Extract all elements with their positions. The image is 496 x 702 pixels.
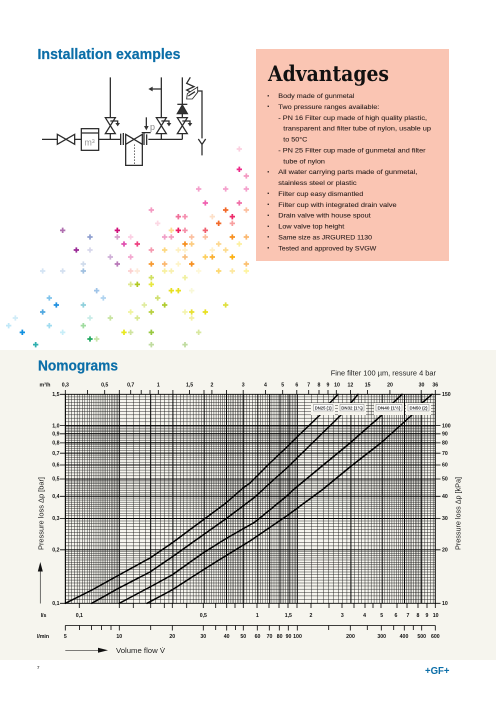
- list: advantages: Same size as JRGURED 1130: [278, 234, 372, 241]
- axis: l/s labels: 10: [433, 613, 439, 619]
- schematic: installation diagram: [42, 77, 206, 165]
- axis: top m³/h labels: [40, 383, 438, 389]
- axis: l/min labels: 500: [417, 634, 426, 640]
- axis: top m³/h labels: 12: [348, 383, 353, 389]
- arrow: branch outlet: [148, 87, 161, 91]
- axis: right kPa labels: 100: [442, 423, 451, 429]
- list: advantages: All water carrying parts made of gunmetal,: [278, 169, 418, 176]
- axis: top m³/h labels: 7: [307, 383, 310, 389]
- axis: top m³/h labels: 0,3: [62, 383, 69, 389]
- axis: top m³/h labels: 36: [432, 383, 438, 389]
- label: DN40: DN40 (1½): [378, 406, 401, 411]
- grid: [65, 394, 436, 603]
- axis: l/s labels: 5: [380, 613, 383, 619]
- axis: l/s labels: 3: [341, 613, 344, 619]
- axis: right kPa labels: 60: [442, 463, 448, 469]
- decorative plus pattern: [6, 146, 249, 347]
- axis: l/min labels: 90: [286, 634, 291, 640]
- curve: DN25: [65, 394, 338, 603]
- arrow: pressure up: [38, 562, 43, 604]
- list: advantages: Filter cup with integrated drain valve: [278, 202, 397, 209]
- axis: l/s labels: 1: [256, 613, 259, 619]
- axis: right kPa labels: 70: [442, 451, 448, 457]
- axis: right kPa labels: 40: [442, 494, 448, 500]
- axis: l/min labels: 70: [267, 634, 272, 640]
- label: DN25: DN25 (1): [315, 406, 332, 411]
- axis: l/s labels: 7: [407, 613, 410, 619]
- list: advantages: ·: [267, 167, 270, 177]
- axis: l/s labels: 2: [310, 613, 313, 619]
- axis: l/s labels: 6: [395, 613, 398, 619]
- axis: l/min labels: 600: [431, 634, 440, 640]
- list: advantages: Tested and approved by SVGW: [278, 245, 377, 252]
- axis: left bar labels: 0,3: [52, 516, 60, 522]
- axis: top m³/h labels: 20: [387, 383, 393, 389]
- axis: top m³/h labels: 0,7: [127, 383, 134, 389]
- axis: top m³/h labels: 4: [264, 383, 267, 389]
- icon: drain funnel: [198, 139, 206, 155]
- axis: left bar labels: 0,2: [52, 548, 60, 554]
- axis: l/s labels: 8: [417, 613, 420, 619]
- axis: top m³/h labels: 30: [419, 383, 424, 389]
- icon: left riser valve: [105, 118, 120, 134]
- axis: l/s labels: 1,5: [285, 613, 292, 619]
- chart caption: Fine filter 100 µm, ressure 4 bar: [331, 368, 436, 378]
- icon: safety valve with spring: [187, 77, 202, 138]
- axis: left bar labels: 0,8: [52, 441, 60, 447]
- axis: l/min labels: 50: [240, 634, 246, 640]
- axis: right kPa labels: 20: [442, 548, 448, 554]
- list: advantages: Two pressure ranges available:: [278, 104, 380, 111]
- curve: DN50: [147, 394, 432, 603]
- list: advantages: Filter cup easy dismantled: [278, 191, 364, 198]
- axis: l/min labels: 30: [200, 634, 206, 640]
- list: advantages: tube of nylon: [283, 158, 325, 165]
- axis: l/s labels: l/s: [41, 613, 46, 619]
- axis: left bar labels: 1,0: [52, 423, 60, 429]
- axis: l/min labels: 40: [224, 634, 230, 640]
- nomogram chart: [37, 382, 462, 653]
- axis: l/s labels: 0,1: [76, 613, 83, 619]
- meter: m³: [84, 137, 95, 147]
- axis: top m³/h labels: 1: [157, 383, 160, 389]
- axis: l/min labels: 10: [116, 634, 122, 640]
- axis: left bar labels: 0,7: [52, 451, 60, 457]
- axis: top m³/h labels: 15: [365, 383, 371, 389]
- curve: DN32: [92, 394, 358, 603]
- list: advantages: ·: [267, 210, 270, 220]
- icon: pressure arrow: [144, 117, 155, 132]
- axis: l/s labels: 4: [363, 613, 366, 619]
- axis: left bar labels: 0,5: [52, 477, 60, 483]
- heading: Installation examples: Installation examples: [38, 46, 180, 63]
- list: advantages: ·: [267, 102, 270, 112]
- list: advantages: transparent and filter tube of nylon, usable up: [283, 126, 431, 133]
- list: advantages: - PN 25 Filter cup made of gunmetal and filter: [278, 147, 427, 154]
- list: advantages: ·: [267, 232, 270, 242]
- axis: top m³/h labels: 1,5: [186, 383, 193, 389]
- page number: 7: [37, 665, 40, 670]
- axis: l/min labels: 5: [64, 634, 67, 640]
- axis: l/min labels: 60: [255, 634, 260, 640]
- axis title: right: Pressure loss Δp [kPa]: [454, 477, 462, 550]
- heading: Nomograms: Nomograms: [38, 358, 118, 374]
- axis: l/min labels: l/min: [37, 634, 49, 640]
- icon: middle riser valve: [156, 118, 171, 134]
- axis: right kPa labels: 80: [442, 441, 448, 447]
- axis: l/min labels: 100: [293, 634, 302, 640]
- axis: l/s labels: 0,5: [200, 613, 207, 619]
- list: advantages: Drain valve with house spout: [278, 213, 371, 220]
- axis: right kPa labels: 150: [442, 392, 451, 398]
- axis: top m³/h labels: 6: [295, 383, 298, 389]
- axis: l/min labels: 20: [169, 634, 175, 640]
- axis: top m³/h labels: 0,5: [101, 383, 108, 389]
- axis: l/min labels: [37, 634, 440, 640]
- icon: inlet valve: [57, 134, 75, 144]
- axis: left bar labels: 1,5: [52, 392, 60, 398]
- curve: DN40: [119, 394, 402, 603]
- list: advantages: stainless steel or plastic: [278, 180, 358, 187]
- axis: top m³/h labels: 9: [327, 383, 330, 389]
- meter: [81, 129, 99, 150]
- axis: l/min labels: 80: [277, 634, 283, 640]
- list: advantages: ·: [267, 91, 270, 101]
- panel: advantages: [256, 49, 449, 261]
- panel: nomograms background: [0, 350, 496, 660]
- axis: l/s labels: [41, 613, 439, 619]
- axis title: bottom: Volume flow V̇: [116, 646, 165, 655]
- axis: l/min labels: 300: [377, 634, 386, 640]
- list: advantages: [267, 91, 431, 253]
- axis: top m³/h labels: 5: [281, 383, 284, 389]
- axis: left bar labels: 0,6: [52, 463, 60, 469]
- axis title: left: Pressure loss Δp [bar]: [36, 477, 46, 550]
- axis ticks: [60, 390, 440, 630]
- list: advantages: ·: [267, 189, 270, 199]
- label: DN50: DN50 (2): [410, 406, 428, 411]
- list: advantages: to 50°C: [283, 136, 308, 144]
- axis: l/min labels: 400: [400, 634, 408, 640]
- axis: right kPa labels: [442, 392, 451, 607]
- axis: l/s labels: 9: [426, 613, 429, 619]
- curves: [65, 394, 432, 603]
- axis: left bar labels: 0,9: [52, 432, 60, 438]
- axis: top m³/h labels: 10: [334, 383, 340, 389]
- axis: right kPa labels: 50: [442, 477, 448, 483]
- axis: top m³/h labels: 2: [211, 383, 214, 389]
- icon: check valve: [177, 104, 187, 114]
- size labels: [311, 403, 431, 415]
- axis: right kPa labels: 10: [442, 601, 448, 607]
- arrow: volume flow: [65, 648, 108, 653]
- list: advantages: Low valve top height: [278, 224, 345, 231]
- axis: right kPa labels: 90: [442, 432, 448, 438]
- axis: left bar labels: 0,1: [52, 601, 60, 607]
- axis: top m³/h labels: 3: [242, 383, 245, 389]
- axis: l/min labels: 200: [346, 634, 355, 640]
- heading: Advantages: Advantages: [267, 61, 389, 86]
- list: advantages: ·: [267, 243, 270, 253]
- icon: filter with cup: [121, 133, 151, 165]
- label: DN32: DN32 (1¼): [341, 406, 363, 411]
- list: advantages: Body made of gunmetal: [278, 93, 354, 100]
- icon: right riser valve: [177, 118, 192, 134]
- list: advantages: - PN 16 Filter cup made of high quality plastic,: [278, 115, 427, 122]
- axis: top m³/h labels: m³/h: [40, 383, 50, 389]
- list: advantages: ·: [267, 221, 270, 231]
- axis: top m³/h labels: 8: [318, 383, 321, 389]
- list: advantages: ·: [267, 200, 270, 210]
- axis: left bar labels: 0,4: [52, 494, 60, 500]
- grid: major lines: [65, 394, 435, 603]
- icon: pressure arrow: p: [150, 122, 155, 132]
- axis: right kPa labels: 30: [442, 516, 448, 522]
- logo: GF: +GF+: [425, 666, 450, 677]
- axis: left bar labels: [52, 392, 60, 607]
